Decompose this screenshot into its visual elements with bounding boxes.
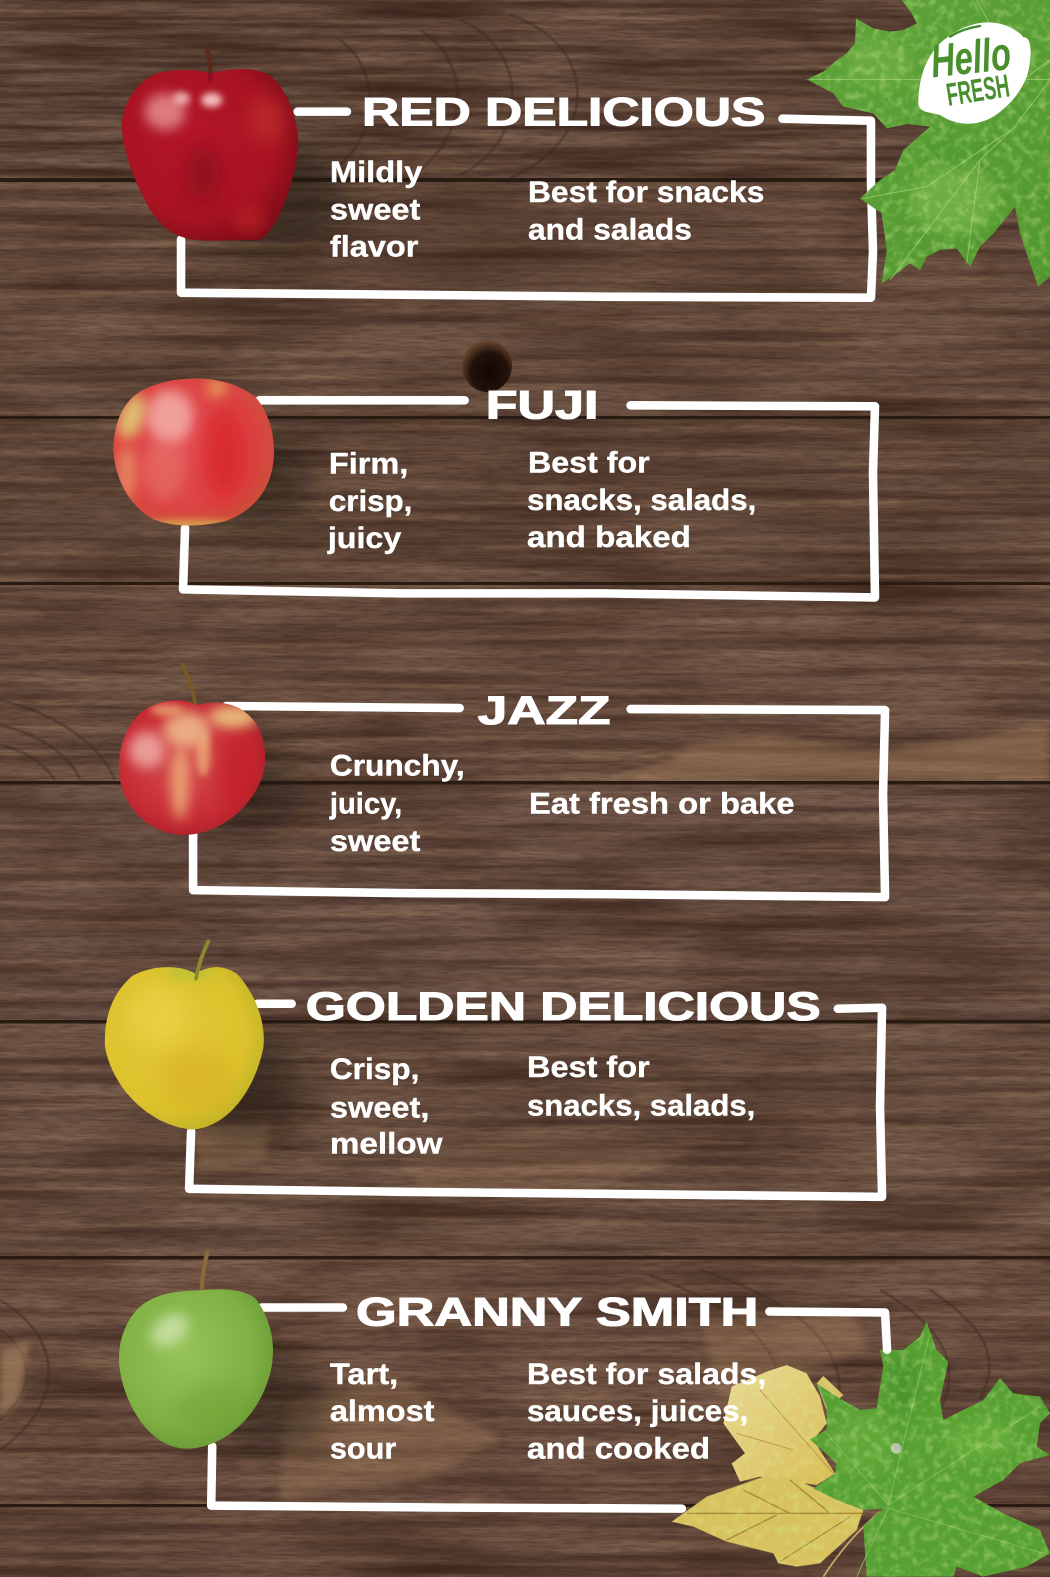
text: best use: sauces, juices, — [527, 1396, 748, 1428]
text: best use: Eat fresh or bake — [529, 789, 795, 821]
title: Red Delicious: RED DELICIOUS — [362, 90, 765, 135]
text: texture — [330, 1054, 443, 1161]
text: texture — [329, 750, 465, 858]
text: best use: and cooked — [527, 1433, 710, 1465]
leaf: pale yellow — [723, 1365, 843, 1485]
apple shadow — [196, 438, 317, 528]
text: best use: Best for — [528, 448, 650, 480]
text: texture: juicy — [327, 523, 402, 555]
text: best use: Best for — [527, 1052, 650, 1084]
text: flavor: almost — [330, 1396, 435, 1428]
bracket: box outline — [193, 709, 885, 897]
leaf: green maple — [810, 1322, 1050, 1577]
text: texture: Crisp, — [330, 1054, 419, 1086]
text: texture: sweet — [330, 826, 421, 858]
text: best use: Best for salads, — [527, 1359, 766, 1391]
text: texture: juicy, — [329, 789, 402, 821]
text: texture — [327, 449, 412, 555]
apple shadow — [201, 754, 302, 835]
apple: golden delicious — [105, 941, 264, 1129]
title: Granny Smith: GRANNY SMITH — [356, 1290, 758, 1335]
text: flavor: Mildly — [330, 157, 423, 189]
text: best use: and salads — [528, 214, 692, 246]
panel: Fuji — [112, 378, 875, 597]
apple: jazz — [119, 665, 265, 835]
bracket: title left stub — [298, 107, 347, 116]
apple: fuji — [112, 378, 274, 534]
panel: Granny Smith — [119, 1252, 887, 1509]
bracket: title left stub — [257, 999, 292, 1008]
bracket: box outline — [181, 119, 873, 298]
text: best use — [527, 448, 756, 554]
text: best use: snacks, salads, — [527, 485, 756, 517]
text: texture: crisp, — [329, 486, 412, 518]
apple: granny smith — [119, 1252, 273, 1449]
bracket: title left stub — [261, 1303, 343, 1312]
text: best use — [527, 1052, 755, 1122]
bracket: box outline right — [769, 1311, 887, 1350]
bracket: box outline left and bottom — [211, 1446, 682, 1509]
text: flavor: flavor — [330, 231, 418, 263]
bracket: box outline — [189, 1008, 882, 1197]
wood knot — [462, 340, 512, 392]
text: flavor — [330, 1359, 435, 1465]
text: best use — [527, 1359, 766, 1465]
title: Fuji: FUJI — [486, 382, 598, 427]
logo: HelloFresh: Hello — [928, 27, 1013, 87]
text: texture: Firm, — [329, 449, 408, 481]
text: flavor: Tart, — [330, 1359, 398, 1391]
text: texture: mellow — [330, 1129, 443, 1161]
leaves: bottom right cluster — [672, 1322, 1050, 1577]
apple shadow — [196, 146, 347, 246]
text: flavor: sour — [330, 1433, 396, 1465]
leaf: golden — [672, 1477, 863, 1567]
text: texture: sweet, — [330, 1092, 429, 1124]
panel: Jazz — [119, 665, 885, 897]
panel: Golden Delicious — [105, 941, 882, 1197]
text: texture: Crunchy, — [330, 750, 465, 782]
logo: HelloFresh — [918, 22, 1031, 124]
apple: red delicious — [122, 50, 298, 241]
leaf stems — [823, 1512, 880, 1577]
text: best use: Best for snacks — [528, 177, 764, 209]
leaf: top right maple — [807, 0, 1050, 287]
wood light patches — [0, 725, 1050, 1500]
panel: Red Delicious — [122, 50, 873, 298]
text: best use: snacks, salads, — [527, 1090, 755, 1122]
bracket: box outline — [183, 405, 875, 597]
text: flavor — [330, 157, 423, 263]
title: Jazz: JAZZ — [478, 688, 610, 733]
text: flavor: sweet — [330, 194, 421, 226]
title: Golden Delicious: GOLDEN DELICIOUS — [306, 984, 821, 1029]
apple shadow — [191, 1036, 302, 1136]
text: best use — [528, 177, 764, 246]
bracket: title left stub — [259, 396, 465, 405]
apple shadow — [206, 1353, 327, 1453]
text: best use: and baked — [527, 522, 691, 554]
bracket: title left stub — [226, 706, 460, 708]
